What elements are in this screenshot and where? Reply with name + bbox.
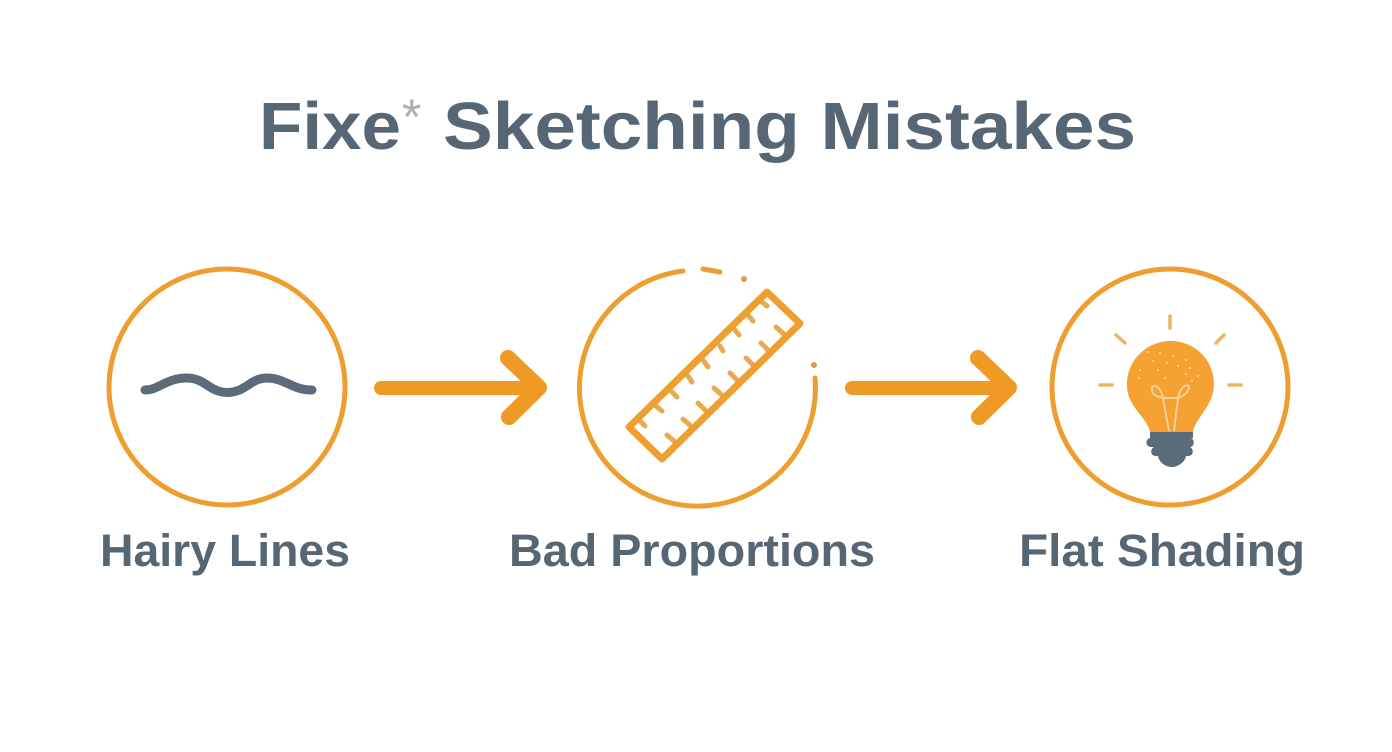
icon: ruler (629, 292, 800, 459)
title: * (402, 89, 421, 145)
step 1: hairy lines (100, 269, 350, 576)
icon circle: flat shading (1052, 269, 1288, 505)
step 2: bad proportions (509, 269, 875, 576)
arrow 2 (852, 358, 1009, 417)
icon: light bulb (1127, 341, 1214, 467)
icon: wavy line (145, 378, 312, 392)
icon: light rays (1100, 316, 1241, 385)
icon: broken circle (579, 269, 817, 506)
icon circle: hairy lines (109, 269, 345, 505)
label: hairy lines: Hairy Lines (100, 525, 350, 576)
title: Fixe (259, 89, 401, 164)
title: Sketching Mistakes (443, 89, 1136, 164)
step 3: flat shading (1019, 269, 1305, 576)
label: flat shading: Flat Shading (1019, 525, 1305, 576)
arrow 1 (381, 358, 539, 417)
label: bad proportions: Bad Proportions (509, 525, 875, 576)
